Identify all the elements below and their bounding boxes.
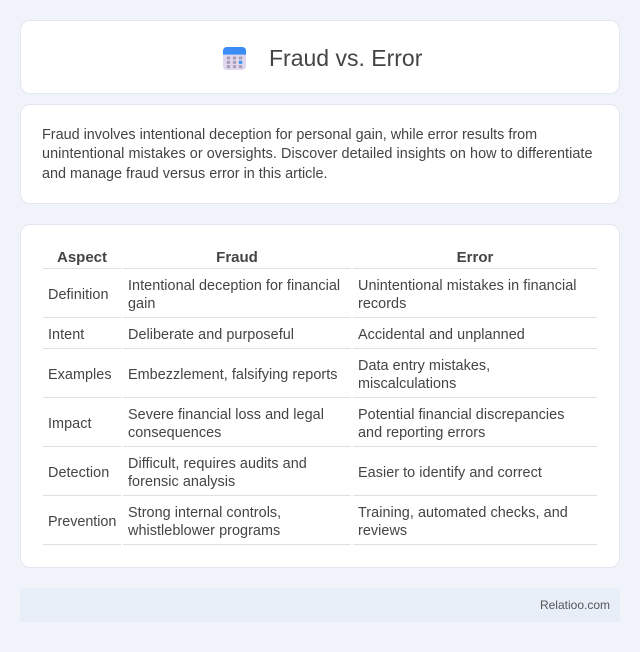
table header xyxy=(43,249,597,269)
comparison table: Fraud xyxy=(216,249,258,266)
comparison table: reviews xyxy=(358,523,407,539)
title panel xyxy=(20,20,620,94)
comparison table: Error xyxy=(457,249,493,266)
comparison table: Training, automated checks, and xyxy=(358,505,568,521)
comparison table: and reporting errors xyxy=(358,425,485,441)
heading: Fraud vs. Error xyxy=(269,45,422,71)
comparison table: consequences xyxy=(128,425,221,441)
comparison table: Easier to identify and correct xyxy=(358,465,542,481)
comparison table: Definition xyxy=(48,287,108,303)
comparison table: Potential financial discrepancies xyxy=(358,407,564,423)
comparison table: Embezzlement, falsifying reports xyxy=(128,367,338,383)
intro panel xyxy=(20,104,620,204)
comparison table: miscalculations xyxy=(358,376,456,392)
comparison table: Severe financial loss and legal xyxy=(128,407,324,423)
intro text: Fraud involves intentional deception for personal gain, while error results from xyxy=(42,126,537,142)
comparison table: Strong internal controls, xyxy=(128,505,281,521)
icon: calendar xyxy=(222,47,246,70)
comparison table: Intent xyxy=(48,327,84,343)
intro text: unintentional mistakes or oversights. Discover detailed insights on how to differentiate xyxy=(42,146,593,162)
comparison table: Deliberate and purposeful xyxy=(128,327,294,343)
comparison table: forensic analysis xyxy=(128,474,235,490)
comparison table: Examples xyxy=(48,367,112,383)
comparison table: Aspect xyxy=(57,249,107,266)
row: detection xyxy=(43,456,597,496)
comparison table: Prevention xyxy=(48,514,116,530)
comparison table: Unintentional mistakes in financial xyxy=(358,278,577,294)
row: definition xyxy=(43,278,597,318)
row: prevention xyxy=(43,505,597,545)
comparison table xyxy=(43,249,597,545)
comparison table: Difficult, requires audits and xyxy=(128,456,307,472)
intro text: and manage fraud versus error in this article. xyxy=(42,166,328,182)
comparison table: gain xyxy=(128,296,155,312)
row: impact xyxy=(43,407,597,447)
comparison table: Detection xyxy=(48,465,109,481)
footer credit: Relatioo.com xyxy=(540,598,610,612)
row: examples xyxy=(43,358,597,398)
comparison table: Accidental and unplanned xyxy=(358,327,525,343)
comparison table: whistleblower programs xyxy=(128,523,280,539)
comparison table: Impact xyxy=(48,416,92,432)
footer bar xyxy=(20,588,620,622)
intro text xyxy=(42,126,593,182)
comparison table: Data entry mistakes, xyxy=(358,358,490,374)
comparison table: records xyxy=(358,296,406,312)
panel: comparison table xyxy=(20,224,620,568)
row: intent xyxy=(43,327,597,349)
comparison table: Intentional deception for financial xyxy=(128,278,340,294)
